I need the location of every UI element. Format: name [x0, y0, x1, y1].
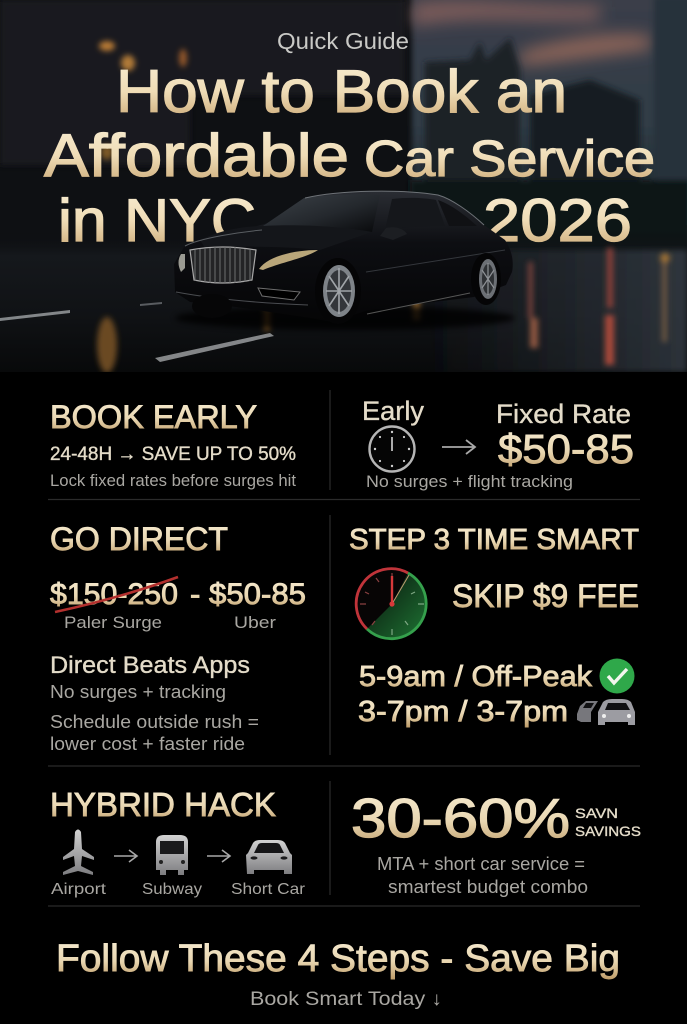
icon: bus [156, 835, 188, 875]
car headlights [259, 250, 318, 270]
title: Car Service [364, 130, 655, 187]
illustration: black luxury sedan [174, 191, 515, 330]
car grille [190, 247, 256, 283]
panel: book early [50, 399, 296, 490]
label: fixed rate: Fixed Rate [496, 399, 631, 429]
label: uber: Uber [234, 613, 276, 632]
callout: skip fee: SKIP $9 FEE [452, 578, 639, 614]
off-peak line: 5-9am / Off-Peak [359, 661, 593, 693]
kicker: Quick Guide: Quick Guide [277, 28, 409, 54]
icon: airplane [63, 830, 94, 875]
text: No surges + tracking [50, 682, 226, 702]
label: early: Early [362, 396, 425, 426]
strike-through [55, 577, 178, 612]
heading: time smart: STEP 3 TIME SMART [349, 524, 639, 556]
label: surge: Paler Surge [64, 613, 162, 632]
panel: hybrid hack [50, 786, 306, 898]
arrow [207, 850, 230, 862]
panel: go direct: - $50-85 [190, 578, 306, 611]
title: How to Book an [116, 58, 567, 125]
title [44, 58, 655, 254]
icon: peak gauge [356, 569, 427, 639]
rush line: 3-7pm / 3-7pm [358, 696, 568, 728]
text: Schedule outside rush = [50, 712, 259, 732]
subheading: Direct Beats Apps [50, 652, 250, 679]
footer link text: Book Smart Today ↓ [250, 989, 442, 1010]
note: No surges + flight tracking [366, 472, 573, 491]
icon: green check [600, 658, 634, 694]
big stat: 30-60% [351, 787, 570, 849]
icon: clock [370, 426, 414, 472]
label: short car: Short Car [231, 881, 306, 898]
panel: go direct [50, 521, 306, 754]
stat label: SAVN [575, 805, 618, 821]
footer call to action: Follow These 4 Steps - Save Big [56, 938, 620, 980]
panel: savings [351, 787, 641, 897]
heading: hybrid hack: HYBRID HACK [50, 786, 276, 823]
text: lower cost + faster ride [50, 734, 245, 754]
icon: traffic cars [577, 699, 635, 725]
title: in NYC [58, 187, 256, 254]
car wheels [192, 294, 232, 318]
title: Affordable [44, 122, 349, 189]
savings line: 24-48H → SAVE UP TO 50% [50, 444, 296, 465]
description: Lock fixed rates before surges hit [50, 471, 296, 490]
description: MTA + short car service = [377, 854, 585, 874]
title: 2026 [483, 187, 632, 254]
arrow [114, 850, 137, 862]
label: airport: Airport [51, 881, 107, 898]
price: $50-85 [498, 426, 634, 472]
panel: early vs fixed rate [362, 396, 634, 491]
description: smartest budget combo [388, 877, 588, 897]
icon: car [246, 840, 292, 874]
heading: book early: BOOK EARLY [50, 399, 257, 435]
price comparison: $150-250 [50, 578, 178, 611]
stat label: SAVINGS [575, 823, 641, 839]
hero background: rainy city street [0, 0, 687, 373]
heading: go direct: GO DIRECT [50, 521, 228, 557]
panel: time smart [349, 524, 639, 728]
label: subway: Subway [142, 881, 202, 898]
arrow [442, 440, 475, 454]
